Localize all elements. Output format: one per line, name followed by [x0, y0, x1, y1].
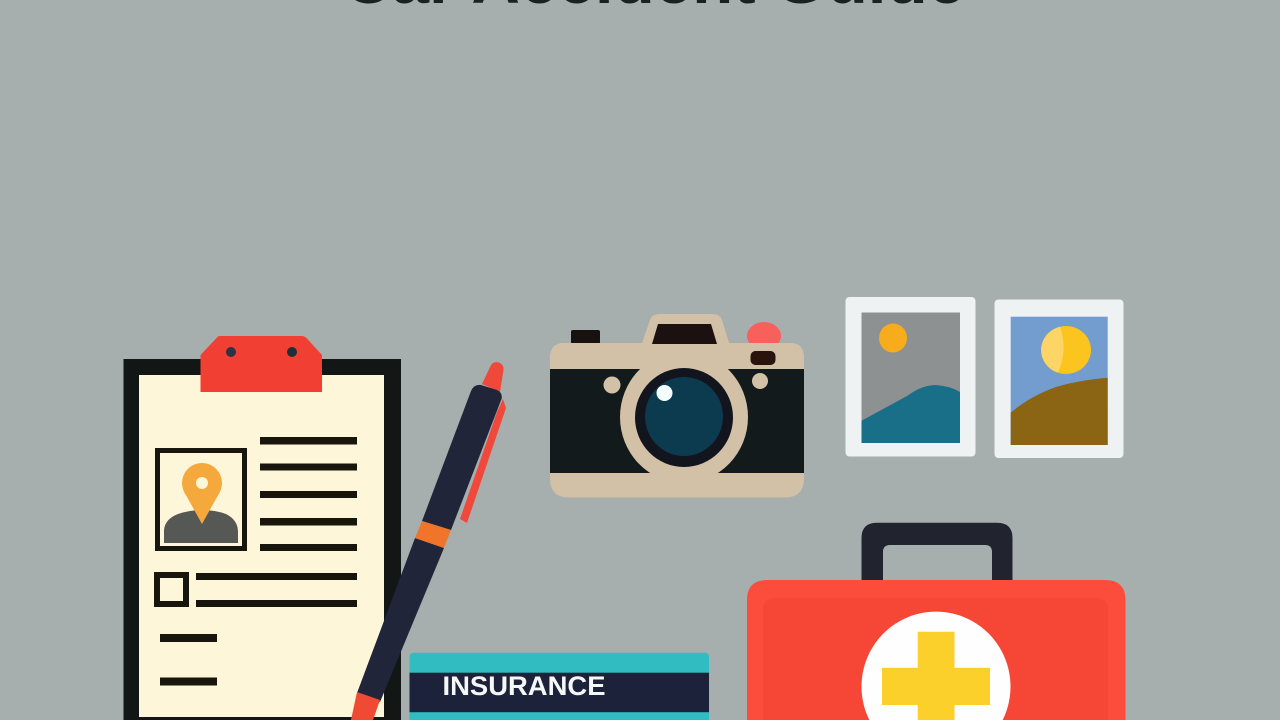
icon: first aid kit [747, 523, 1126, 720]
icon: clipboard with form [124, 336, 401, 720]
icon: insurance card [410, 653, 709, 720]
clipboard board [124, 359, 401, 720]
checkbox [157, 575, 186, 604]
icon: camera [550, 314, 804, 498]
white circle [862, 612, 1010, 720]
icon: photo with brown hill [994, 300, 1124, 458]
kit handle [862, 523, 1012, 582]
clipboard clip [200, 336, 322, 392]
form text lines [160, 437, 357, 686]
icon: pen [351, 362, 506, 720]
photo ID with person and pin [158, 450, 244, 548]
kit case [747, 580, 1126, 720]
paper sheet [139, 375, 384, 717]
icon: insurance card: INSURANCE [442, 671, 606, 701]
icon: photo with teal hill [846, 297, 976, 456]
yellow cross [882, 632, 990, 720]
